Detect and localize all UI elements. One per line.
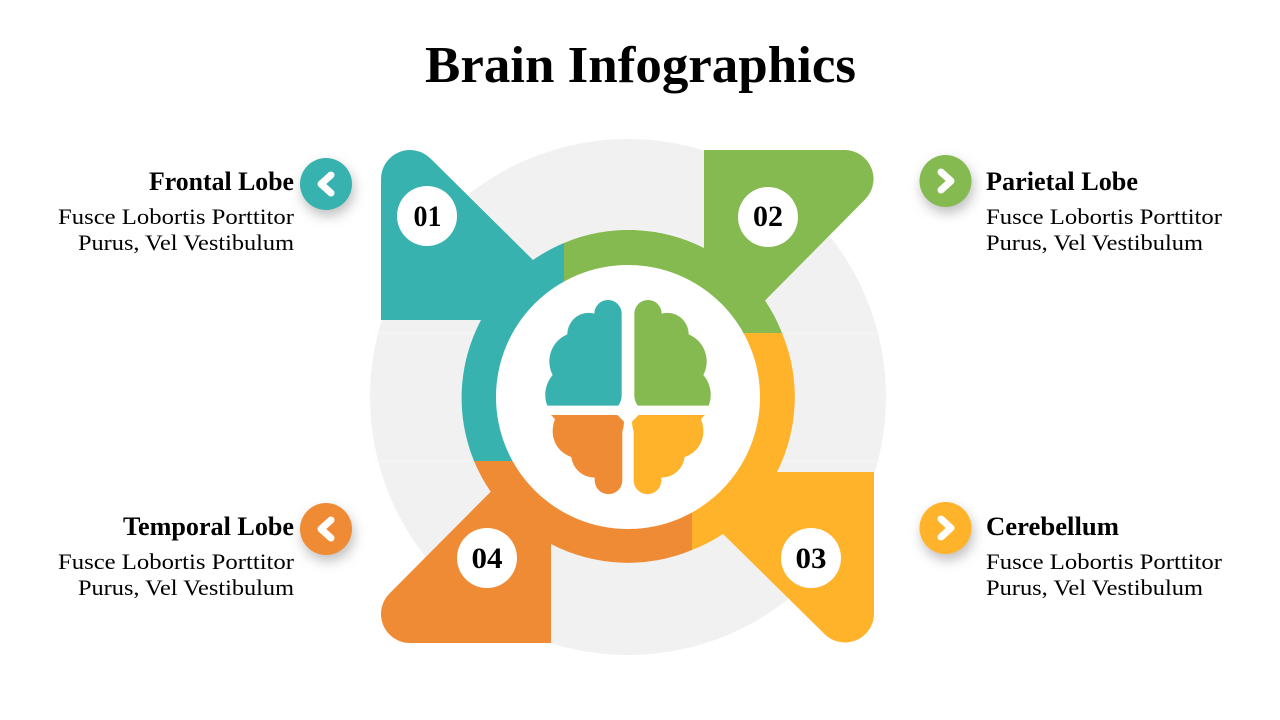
segment 04: temporal lobe arrow [381,397,692,643]
background grey circle [370,139,886,655]
text block: temporal lobe: Purus, Vel Vestibulum [78,575,294,600]
text block: cerebellum: Cerebellum [986,512,1119,541]
brain lobe: yellow [632,415,705,494]
number badge 02: 02 [753,200,783,233]
number badge 02 [738,187,798,247]
segment 01: frontal lobe arrow [381,150,628,461]
brain lobe: green [634,300,711,406]
title: Brain Infographics [425,37,856,94]
text block: parietal lobe: Fusce Lobortis Porttitor [986,204,1223,229]
text block: parietal lobe: Parietal Lobe [986,167,1138,196]
text block: frontal lobe: Purus, Vel Vestibulum [78,230,294,255]
text block: temporal lobe [58,512,295,600]
text block: frontal lobe: Fusce Lobortis Porttitor [58,204,295,229]
text block: cerebellum [986,512,1223,600]
icon: yellow chevron button [920,502,972,554]
text block: cerebellum: Purus, Vel Vestibulum [986,575,1203,600]
number badge 03: 03 [796,542,826,575]
number badge 04: 04 [472,542,502,575]
number badge 03 [781,528,841,588]
text block: frontal lobe [58,167,295,255]
text block: cerebellum: Fusce Lobortis Porttitor [986,549,1223,574]
text block: frontal lobe: Frontal Lobe [149,167,294,196]
text block: parietal lobe: Purus, Vel Vestibulum [986,230,1203,255]
icon: orange chevron button [300,503,352,555]
number badge 01 [397,186,457,246]
text block: temporal lobe: Temporal Lobe [123,512,294,541]
segment 02: parietal lobe arrow [564,150,873,397]
number badge 04 [457,528,517,588]
text block: parietal lobe [986,167,1223,255]
brain lobe: orange [551,415,624,494]
icon: green chevron button [920,155,972,207]
text block: temporal lobe: Fusce Lobortis Porttitor [58,549,295,574]
icon: teal chevron button [300,158,352,210]
segment 03: cerebellum arrow [628,333,874,642]
centre white circle [496,265,760,529]
icon: brain [545,300,711,494]
brain lobe: teal [545,300,622,406]
number badge 01: 01 [414,200,442,233]
